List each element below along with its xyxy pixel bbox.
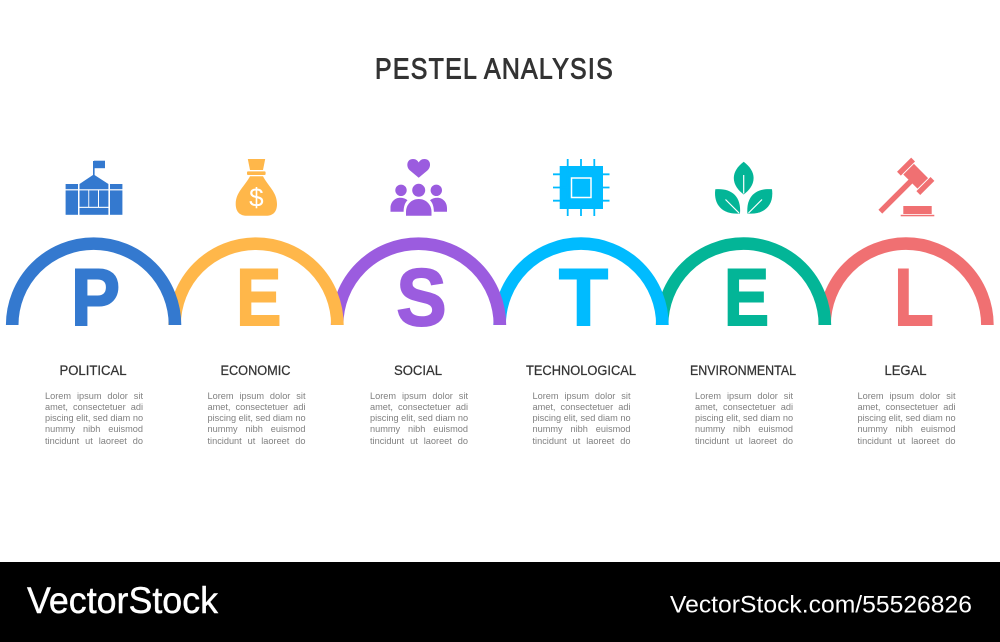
icon: people with heart [390, 159, 447, 216]
text block: environmental [695, 390, 793, 446]
heading: legal: LEGAL [884, 363, 927, 378]
heading: social: SOCIAL [394, 363, 442, 378]
text block: technological: amet, consectetuer adi [532, 402, 630, 412]
text block: technological [532, 390, 631, 446]
text block: social: nummy nibh euismod [370, 424, 468, 434]
heading: economic: ECONOMIC [220, 363, 291, 378]
arc and letter: L: L [894, 253, 934, 343]
heading: environmental: ENVIRONMENTAL [690, 363, 796, 378]
icon: microchip [553, 159, 610, 216]
arc and letter: S: S [396, 253, 446, 343]
text block: economic: piscing elit, sed diam no [208, 413, 306, 423]
text block: legal: piscing elit, sed diam no [858, 413, 956, 423]
text block: social: piscing elit, sed diam no [370, 413, 468, 423]
footer url text: VectorStock.com/55526826 [670, 592, 972, 618]
text block: political: Lorem ipsum dolor sit [45, 390, 143, 400]
icon: money bag [236, 159, 277, 216]
footer bar [0, 562, 1000, 642]
icon: leaves [715, 162, 772, 214]
text block: legal: Lorem ipsum dolor sit [858, 390, 956, 400]
heading: political: POLITICAL [60, 363, 127, 378]
text block: social [370, 390, 468, 446]
arc and letter: E (environmental): E [724, 253, 769, 343]
text block: political: nummy nibh euismod [45, 424, 143, 434]
arc and letter: L [825, 244, 987, 343]
text block: economic: nummy nibh euismod [208, 424, 306, 434]
arc and letter: E (environmental) [662, 244, 825, 343]
text block: legal: amet, consectetuer adi [858, 402, 956, 412]
arc and letter: S [337, 244, 500, 343]
title: PESTEL ANALYSIS [375, 54, 614, 86]
text block: environmental: piscing elit, sed diam no [695, 413, 793, 423]
heading: technological: TECHNOLOGICAL [526, 363, 636, 378]
icon: gavel [869, 158, 934, 223]
text block: political: piscing elit, sed diam no [45, 413, 143, 423]
text block: technological: tincidunt ut laoreet do [532, 436, 630, 446]
text block: legal [858, 390, 956, 446]
text block: social: amet, consectetuer adi [370, 402, 468, 412]
arc and letter: E (economic): E [236, 253, 281, 343]
text block: social: Lorem ipsum dolor sit [370, 390, 468, 400]
text block: political: tincidunt ut laoreet do [45, 436, 143, 446]
text block: economic: Lorem ipsum dolor sit [208, 390, 306, 400]
arc and letter: E (economic) [175, 244, 337, 343]
arc and letter: T [500, 244, 662, 343]
text block: environmental: nummy nibh euismod [695, 424, 793, 434]
arc and letter: T: T [559, 253, 608, 343]
text block: economic [208, 390, 306, 446]
text block: economic: amet, consectetuer adi [208, 402, 306, 412]
text block: technological: Lorem ipsum dolor sit [532, 390, 630, 400]
text block: legal: nummy nibh euismod [858, 424, 956, 434]
footer logo text: VectorStock [27, 580, 218, 621]
text block: technological: nummy nibh euismod [532, 424, 630, 434]
text block: social: tincidunt ut laoreet do [370, 436, 468, 446]
text block: economic: tincidunt ut laoreet do [208, 436, 306, 446]
text block: environmental: Lorem ipsum dolor sit [695, 390, 793, 400]
text block: technological: piscing elit, sed diam no [532, 413, 631, 423]
text block: political: amet, consectetuer adi [45, 402, 143, 412]
text block: legal: tincidunt ut laoreet do [858, 436, 956, 446]
icon: government building [66, 161, 122, 215]
text block: political [45, 390, 143, 446]
arc and letter: P: P [71, 253, 120, 343]
text block: environmental: tincidunt ut laoreet do [695, 436, 793, 446]
arc and letter: P [12, 244, 175, 343]
icon: money bag: $ [249, 182, 264, 212]
text block: environmental: amet, consectetuer adi [695, 402, 793, 412]
